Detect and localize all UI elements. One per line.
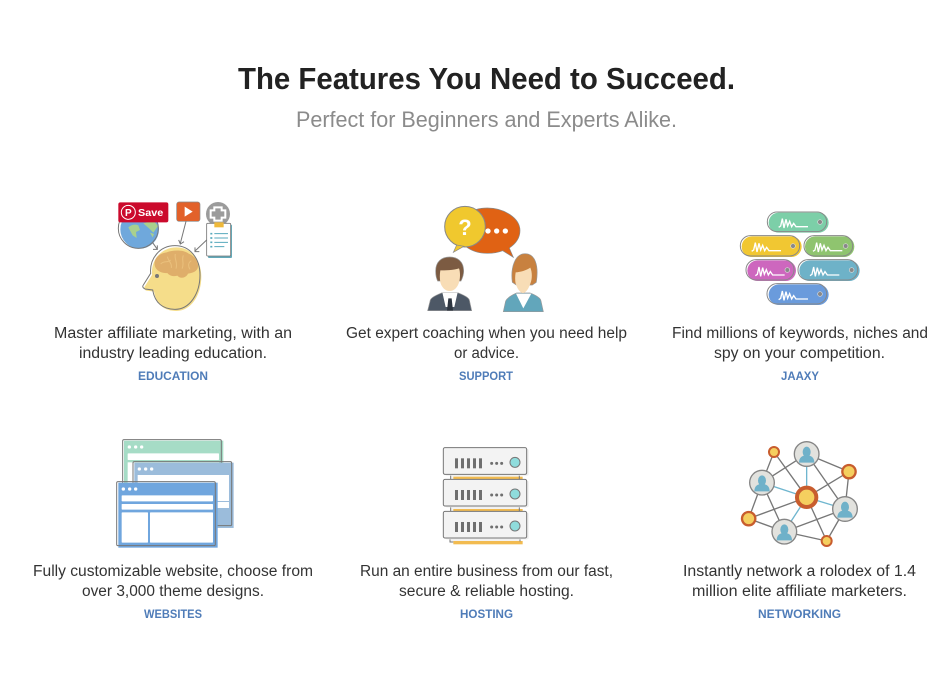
icon: brain, globe, video and checklist <box>118 202 232 311</box>
label: networking: NETWORKING <box>758 607 841 621</box>
panel: support <box>346 206 627 383</box>
label: websites: WEBSITES <box>144 607 202 621</box>
description: support: or advice. <box>454 345 519 362</box>
description: networking <box>683 563 916 600</box>
title: The Features You Need to Succeed. <box>238 61 735 96</box>
icon: people network graph <box>742 442 857 546</box>
label: education: EDUCATION <box>138 369 208 383</box>
description: support <box>346 325 627 362</box>
icon: two people with speech bubbles: ? <box>458 215 472 240</box>
panel: websites <box>33 440 313 621</box>
label: jaaxy: JAAXY <box>781 369 819 383</box>
icon: brain, globe, video and checklist: P <box>125 208 132 219</box>
description: hosting: secure & reliable hosting. <box>399 583 574 600</box>
icon: keyword tags <box>740 212 860 305</box>
icon: server rack <box>443 448 529 544</box>
description: jaaxy: spy on your competition. <box>714 345 885 362</box>
panel: networking <box>683 442 916 621</box>
icon: two people with speech bubbles <box>428 206 543 312</box>
description: networking: Instantly network a rolodex of 1.4 <box>683 563 916 580</box>
panel: education <box>54 202 292 383</box>
description: websites: Fully customizable website, choose from <box>33 563 313 580</box>
description: jaaxy: Find millions of keywords, niches and <box>672 325 928 342</box>
label: support: SUPPORT <box>459 369 514 383</box>
label: hosting: HOSTING <box>460 607 513 621</box>
icon: brain, globe, video and checklist: Save <box>138 208 164 219</box>
description: websites: over 3,000 theme designs. <box>82 583 264 600</box>
description: jaaxy <box>672 325 928 362</box>
description: education <box>54 325 292 362</box>
description: networking: million elite affiliate marketers. <box>692 583 907 600</box>
description: hosting: Run an entire business from our fast, <box>360 563 613 580</box>
description: websites <box>33 563 313 600</box>
description: education: Master affiliate marketing, with an <box>54 325 292 342</box>
panel: jaaxy <box>672 212 928 383</box>
description: support: Get expert coaching when you need help <box>346 325 627 342</box>
icon: stacked browser windows <box>117 440 234 548</box>
description: education: industry leading education. <box>79 345 267 362</box>
description: hosting <box>360 563 613 600</box>
panel: hosting <box>360 448 613 621</box>
subtitle: Perfect for Beginners and Experts Alike. <box>296 107 677 132</box>
